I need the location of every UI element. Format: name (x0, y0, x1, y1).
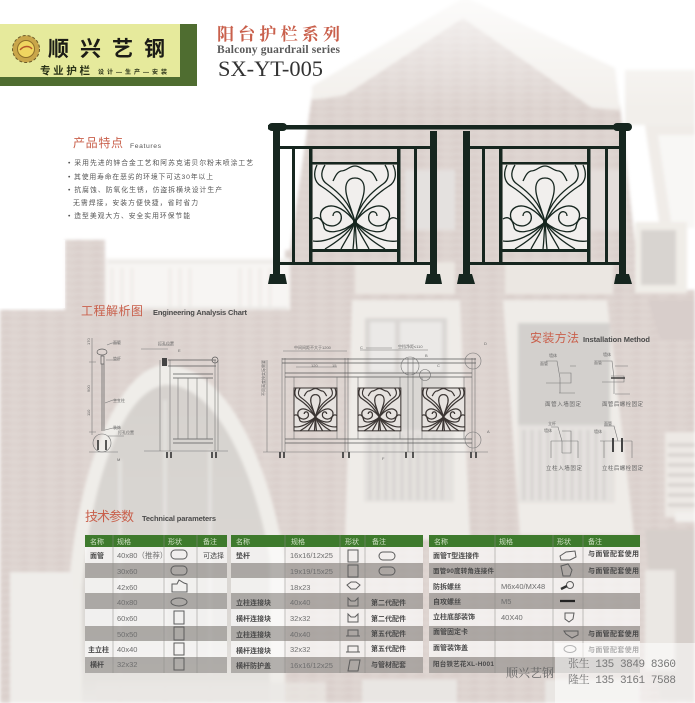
logo services: 设计—生产—安装 (98, 68, 167, 76)
drawing: side section: 900 (86, 385, 91, 392)
table: profiles: 32x32 (117, 660, 137, 669)
diagram: post bolted to wall (594, 420, 643, 472)
drawing: side section: M (117, 457, 120, 462)
table: accessories A: 第五代配件 (371, 629, 406, 638)
left railing ornament (313, 165, 397, 249)
table: accessories A: 名称 (236, 537, 250, 546)
feature list: 无需焊接，安装方便快捷，省时省力 (73, 198, 198, 207)
drawing: front elevation three bays: 空挡净距≤110 (398, 343, 423, 349)
logo banner (0, 24, 197, 86)
table: profiles: 40x80（推荐） (117, 550, 167, 560)
table: accessories A: 19x19/15x25 (290, 567, 333, 576)
diagram: rail into wall: 面管 (540, 360, 548, 366)
drawing: front elevation three bays (260, 341, 490, 461)
table: accessories A: 备注 (372, 537, 386, 546)
panel: installation method (530, 330, 650, 472)
table: accessories A: 40x40 (290, 598, 310, 607)
table: profiles: 40x40 (117, 645, 137, 654)
table: profiles: 面管 (90, 551, 104, 560)
railing illustration (268, 123, 632, 284)
heading: features: 产品特点 (73, 135, 123, 150)
table: profiles: 主立柱 (88, 645, 109, 654)
feature list: • 造型美观大方、安全实用环保节能 (68, 211, 190, 220)
feature list: • 抗腐蚀、防氧化生锈，仿盗拆横块设计生产 (68, 185, 222, 194)
footer: contact phones: 隆生 135 3161 7588 (568, 672, 676, 687)
table: profiles: 30x60 (117, 567, 137, 576)
table: profiles: 备注 (203, 537, 217, 546)
drawing: side section: 装饰 (113, 424, 121, 430)
drawing: side section: 打孔位置 (118, 429, 134, 435)
table: accessories A: 垫杆 (236, 551, 250, 560)
table: accessories B: 名称 (434, 537, 448, 546)
title block (217, 24, 341, 81)
table: accessories A: 规格 (291, 537, 305, 546)
diagram: rail bolted to wall: 墙体 (603, 351, 611, 357)
table: profiles: 60x60 (117, 614, 137, 623)
title: english: Balcony guardrail series (217, 44, 341, 56)
table: accessories B: 自攻螺丝 (433, 597, 461, 606)
table: profiles: 40x80 (117, 598, 137, 607)
table: accessories B: 与面管配套使用 (588, 629, 639, 638)
right railing ornament (503, 165, 587, 249)
table: accessories B: 形状 (557, 537, 571, 546)
drawing: front elevation single bay: E (178, 348, 181, 353)
diagram: post into wall: 墙体 (544, 427, 552, 433)
panel: features (68, 135, 253, 220)
table: accessories A: 32x32 (290, 614, 310, 623)
panel: technical parameters (85, 509, 640, 673)
table: accessories B: 面管装饰盖 (433, 643, 468, 652)
heading: technical: 技术参数 (85, 509, 134, 524)
drawing: front elevation three bays: C (437, 363, 440, 368)
table: accessories B: 面管固定卡 (433, 627, 468, 636)
diagram: post into wall: 立杆 (548, 420, 556, 426)
table: accessories A: 第二代配件 (371, 598, 406, 607)
model number: SX-YT-005 (218, 56, 323, 81)
table: accessories A: 横杆防护盖 (236, 661, 271, 670)
table: accessories B: 40X40 (501, 613, 523, 622)
drawing: front elevation three bays: F (382, 456, 385, 461)
drawing: front elevation three bays: B (425, 353, 428, 358)
drawing: side section: 170 (86, 338, 91, 345)
diagram: rail bolted to wall (594, 351, 643, 408)
table: accessories B: 与面管配套使用 (588, 566, 639, 575)
table: accessories A: 第五代配件 (371, 644, 406, 653)
drawing: front elevation three bays: 不同高度按实际需要 (260, 360, 266, 396)
drawing: front elevation three bays: 15 (332, 363, 337, 368)
table: accessories A (231, 535, 423, 673)
table: accessories A: 与管材配套 (371, 660, 406, 669)
footer: brand: 顺兴艺钢 (506, 664, 554, 681)
panel: engineering analysis (81, 303, 490, 462)
drawing: front elevation single bay: 打孔位置 (158, 340, 174, 346)
logo name: 顺兴艺钢 (48, 38, 165, 61)
diagram: post bolted to wall: 立柱后螺栓固定 (602, 464, 643, 472)
table: accessories A: 32x32 (290, 645, 310, 654)
diagram: post bolted to wall: 墙体 (594, 428, 602, 434)
diagram: post into wall: 立柱入墙固定 (546, 464, 582, 472)
table: accessories B: 防拆螺丝 (433, 582, 461, 591)
table: accessories B: 与面管配套使用 (588, 645, 639, 654)
feature list (68, 158, 253, 220)
table: accessories A: 形状 (345, 537, 359, 546)
drawing: front elevation three bays: C (360, 345, 363, 350)
heading: technical english: Technical parameters (142, 514, 216, 523)
table: accessories B (429, 535, 640, 673)
feature list: • 采用先进的锌合金工艺和阿苏克诺贝尔粉末喷涂工艺 (68, 158, 253, 167)
diagram: rail into wall: 面管入墙固定 (545, 400, 581, 408)
ornament drawing 3 (422, 388, 465, 431)
footer: contact phones: 张生 135 3849 8360 (568, 656, 676, 671)
drawing: front elevation three bays: 120 (311, 363, 318, 368)
drawing: front elevation single bay (141, 340, 228, 458)
ornament drawing 1 (294, 388, 337, 431)
diagram: rail bolted to wall: 面管后螺栓固定 (602, 400, 643, 408)
table: profiles: 42x60 (117, 583, 137, 592)
table: accessories B: 立柱底部装饰 (433, 612, 475, 621)
table: accessories A: 16x16/12x25 (290, 661, 333, 670)
ornament drawing 2 (358, 388, 401, 431)
diagram: rail into wall: 墙体 (549, 352, 557, 358)
table: accessories A: 16x16/12x25 (290, 551, 333, 560)
table: profiles: 名称 (90, 537, 104, 546)
logo slogan: 专业护栏 (40, 64, 90, 77)
drawing: side section: 110 (86, 409, 91, 416)
drawing: side section (86, 338, 134, 462)
diagram: post bolted to wall: 面管 (604, 420, 612, 426)
heading: engineering: 工程解析图 (81, 303, 143, 318)
heading: installation english: Installation Method (583, 335, 650, 344)
table: accessories B: 面管90度转角连接件 (433, 566, 494, 575)
table: profiles: 形状 (168, 537, 182, 546)
title: chinese: 阳台护栏系列 (217, 24, 340, 44)
heading: features english: Features (130, 143, 162, 150)
drawing: front elevation three bays: D (484, 341, 487, 346)
table: profiles: 50x50 (117, 630, 137, 639)
table: accessories A: 横杆连接块 (236, 614, 271, 623)
table: accessories B: 阳台铁艺花XL-H001 (433, 659, 494, 668)
diagram: rail bolted to wall: 面管 (594, 359, 602, 365)
drawing: front elevation three bays: 中间间距不大于1200 (294, 344, 332, 350)
table: accessories B: 备注 (588, 537, 602, 546)
diagram: rail into wall (540, 352, 581, 408)
table: accessories B: 与面管配套使用 (588, 549, 639, 558)
table: accessories A: 立柱连接块 (236, 598, 271, 607)
diagram: post into wall (544, 420, 582, 472)
table: profiles: 横杆 (90, 660, 104, 669)
table: accessories B: 面管T型连接件 (433, 551, 479, 560)
table: profiles (85, 535, 227, 673)
heading: engineering english: Engineering Analysis Chart (153, 308, 248, 317)
footer: contact phones (568, 656, 676, 687)
drawing: side section: 面管 (113, 339, 121, 345)
drawing: side section: 主立柱 (113, 397, 125, 403)
table: accessories A: 18x23 (290, 583, 310, 592)
table: accessories A: 40x40 (290, 630, 310, 639)
drawing: side section: 垫杆 (113, 355, 121, 361)
feature list: • 其使用寿命在恶劣的环境下可达30年以上 (68, 172, 213, 181)
drawing: front elevation three bays: A (487, 429, 490, 434)
icon: sun emblem (12, 36, 40, 62)
table: accessories B: M6x40/MX48 (501, 582, 545, 591)
table: accessories A: 横杆连接块 (236, 646, 271, 655)
table: accessories B: 规格 (499, 537, 513, 546)
table: profiles: 可选择 (203, 551, 224, 560)
table: profiles: 规格 (117, 537, 131, 546)
table: accessories A: 第二代配件 (371, 614, 406, 623)
footer fade overlay (555, 643, 695, 703)
heading: installation: 安装方法 (530, 330, 579, 345)
table: accessories B: M5 (501, 597, 511, 606)
table: accessories A: 立柱连接块 (236, 630, 271, 639)
